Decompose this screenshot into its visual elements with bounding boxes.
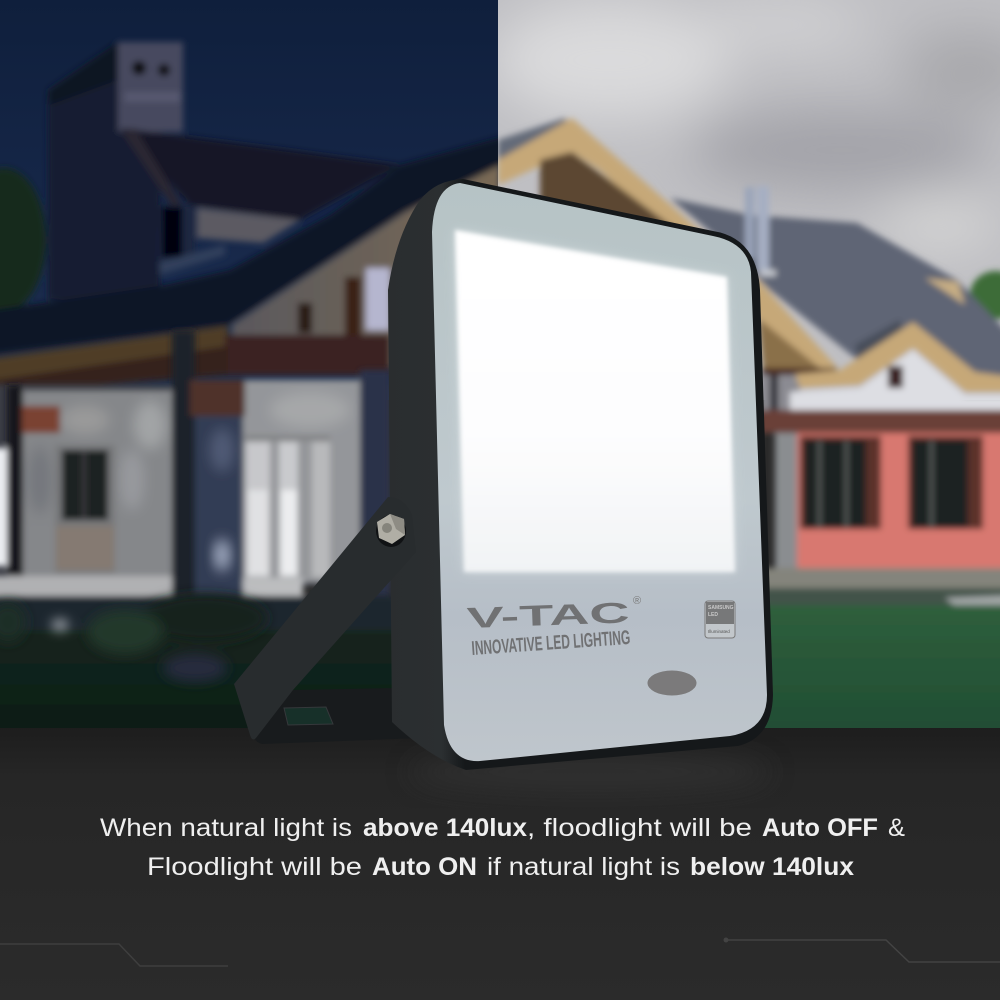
dusk sensor bbox=[648, 670, 696, 696]
caption line 2: below 140lux bbox=[690, 853, 854, 881]
glow around LED panel bbox=[455, 230, 735, 572]
Samsung LED badge: SAMSUNG bbox=[708, 605, 734, 611]
V-TAC logo bbox=[466, 595, 641, 635]
dark lower panel bbox=[0, 728, 1000, 1000]
V-TAC logo: V-TAC bbox=[466, 597, 630, 635]
right day house bbox=[490, 0, 1000, 740]
bracket slot bbox=[284, 707, 333, 725]
front glass bbox=[432, 183, 767, 761]
caption line 1: , floodlight will be bbox=[527, 814, 752, 842]
caption bbox=[100, 814, 905, 881]
decorative circuit line left bbox=[0, 944, 228, 966]
Samsung LED badge bbox=[705, 601, 735, 638]
caption line 1: above 140lux bbox=[363, 814, 527, 842]
bolt bbox=[376, 514, 406, 547]
caption line 1: Auto OFF bbox=[762, 814, 878, 842]
caption line 2: Auto ON bbox=[372, 853, 477, 881]
tagline: INNOVATIVE LED LIGHTING bbox=[471, 627, 631, 660]
stone walls bbox=[0, 330, 400, 740]
Samsung LED badge: Illuminated bbox=[708, 629, 730, 634]
floodlight bbox=[388, 179, 773, 770]
caption line 1: When natural light is bbox=[100, 814, 352, 842]
garden bbox=[0, 594, 267, 682]
photo background: house at dusk and day bbox=[0, 0, 1000, 740]
left night house bbox=[0, 0, 520, 740]
caption line 1: & bbox=[888, 814, 905, 842]
Samsung LED badge: LED bbox=[708, 612, 718, 618]
decorative circuit line right bbox=[724, 938, 1000, 962]
mounting bracket arm bbox=[234, 497, 416, 739]
caption line 2: if natural light is bbox=[487, 853, 680, 881]
bracket base plate bbox=[252, 688, 420, 744]
floodlight reflection bbox=[410, 752, 770, 792]
caption line 2: Floodlight will be bbox=[147, 853, 362, 881]
V-TAC logo: ® bbox=[633, 595, 641, 607]
housing bbox=[388, 179, 773, 770]
lit LED panel bbox=[455, 230, 735, 572]
